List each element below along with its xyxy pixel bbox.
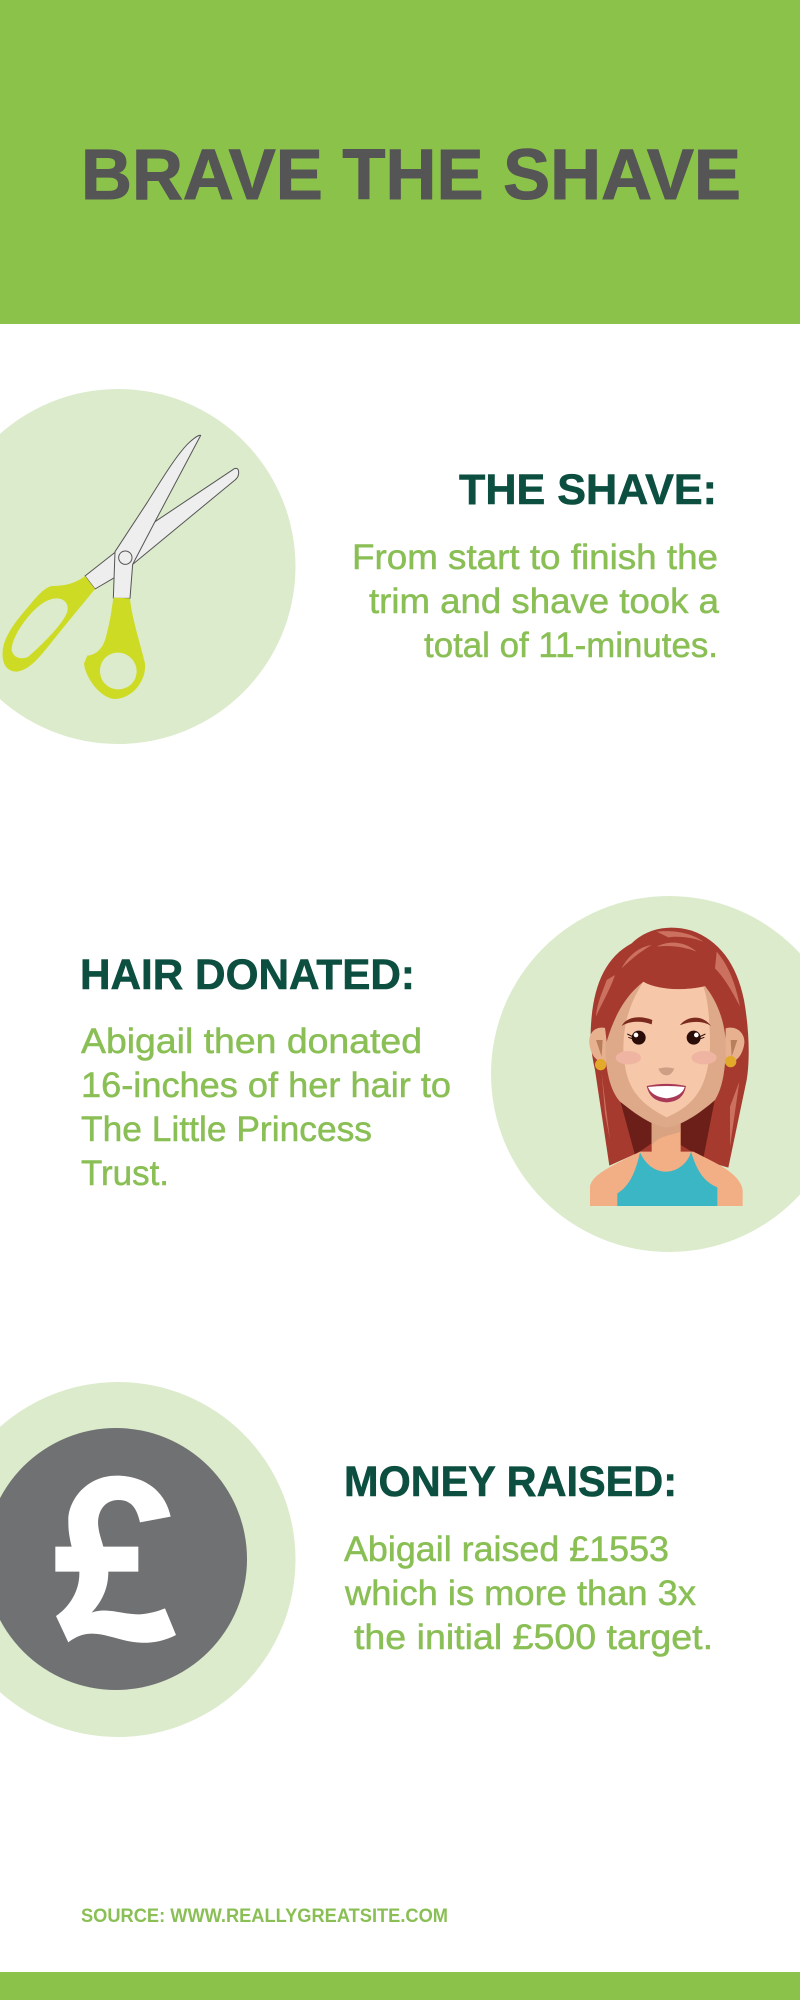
text block: the shave: From start to finish the	[352, 538, 718, 577]
header band	[0, 0, 800, 324]
title: BRAVE THE SHAVE	[81, 136, 741, 215]
text block: hair donated	[81, 1022, 451, 1193]
footer band	[0, 1972, 800, 2000]
text block: hair donated: 16-inches of her hair to	[81, 1066, 451, 1105]
text block: hair donated: Abigail then donated	[81, 1022, 422, 1061]
panel: the shave	[0, 389, 720, 744]
circle background	[0, 1382, 296, 1737]
text block: money raised: the initial £500 target.	[354, 1618, 713, 1657]
circle background	[0, 389, 296, 744]
text block: money raised	[344, 1530, 713, 1657]
text block: hair donated: Trust.	[81, 1154, 169, 1193]
source line: SOURCE: WWW.REALLYGREATSITE.COM	[81, 1906, 448, 1927]
text block: money raised: Abigail raised £1553	[344, 1530, 669, 1569]
text block: money raised: which is more than 3x	[344, 1574, 697, 1613]
icon: scissors	[3, 435, 239, 699]
heading: money raised: MONEY RAISED:	[344, 1458, 677, 1506]
panel: hair donated	[80, 896, 800, 1252]
text block: hair donated: The Little Princess	[81, 1110, 372, 1149]
circle background	[491, 896, 800, 1252]
heading: hair donated: HAIR DONATED:	[80, 951, 415, 999]
icon: woman portrait	[589, 928, 749, 1206]
text block: the shave	[352, 538, 720, 665]
text block: the shave: trim and shave took a	[369, 582, 720, 621]
text block: the shave: total of 11-minutes.	[424, 626, 718, 665]
icon: pound coin	[0, 1428, 247, 1690]
panel: money raised	[0, 1382, 713, 1737]
heading: the shave: THE SHAVE:	[459, 466, 717, 514]
